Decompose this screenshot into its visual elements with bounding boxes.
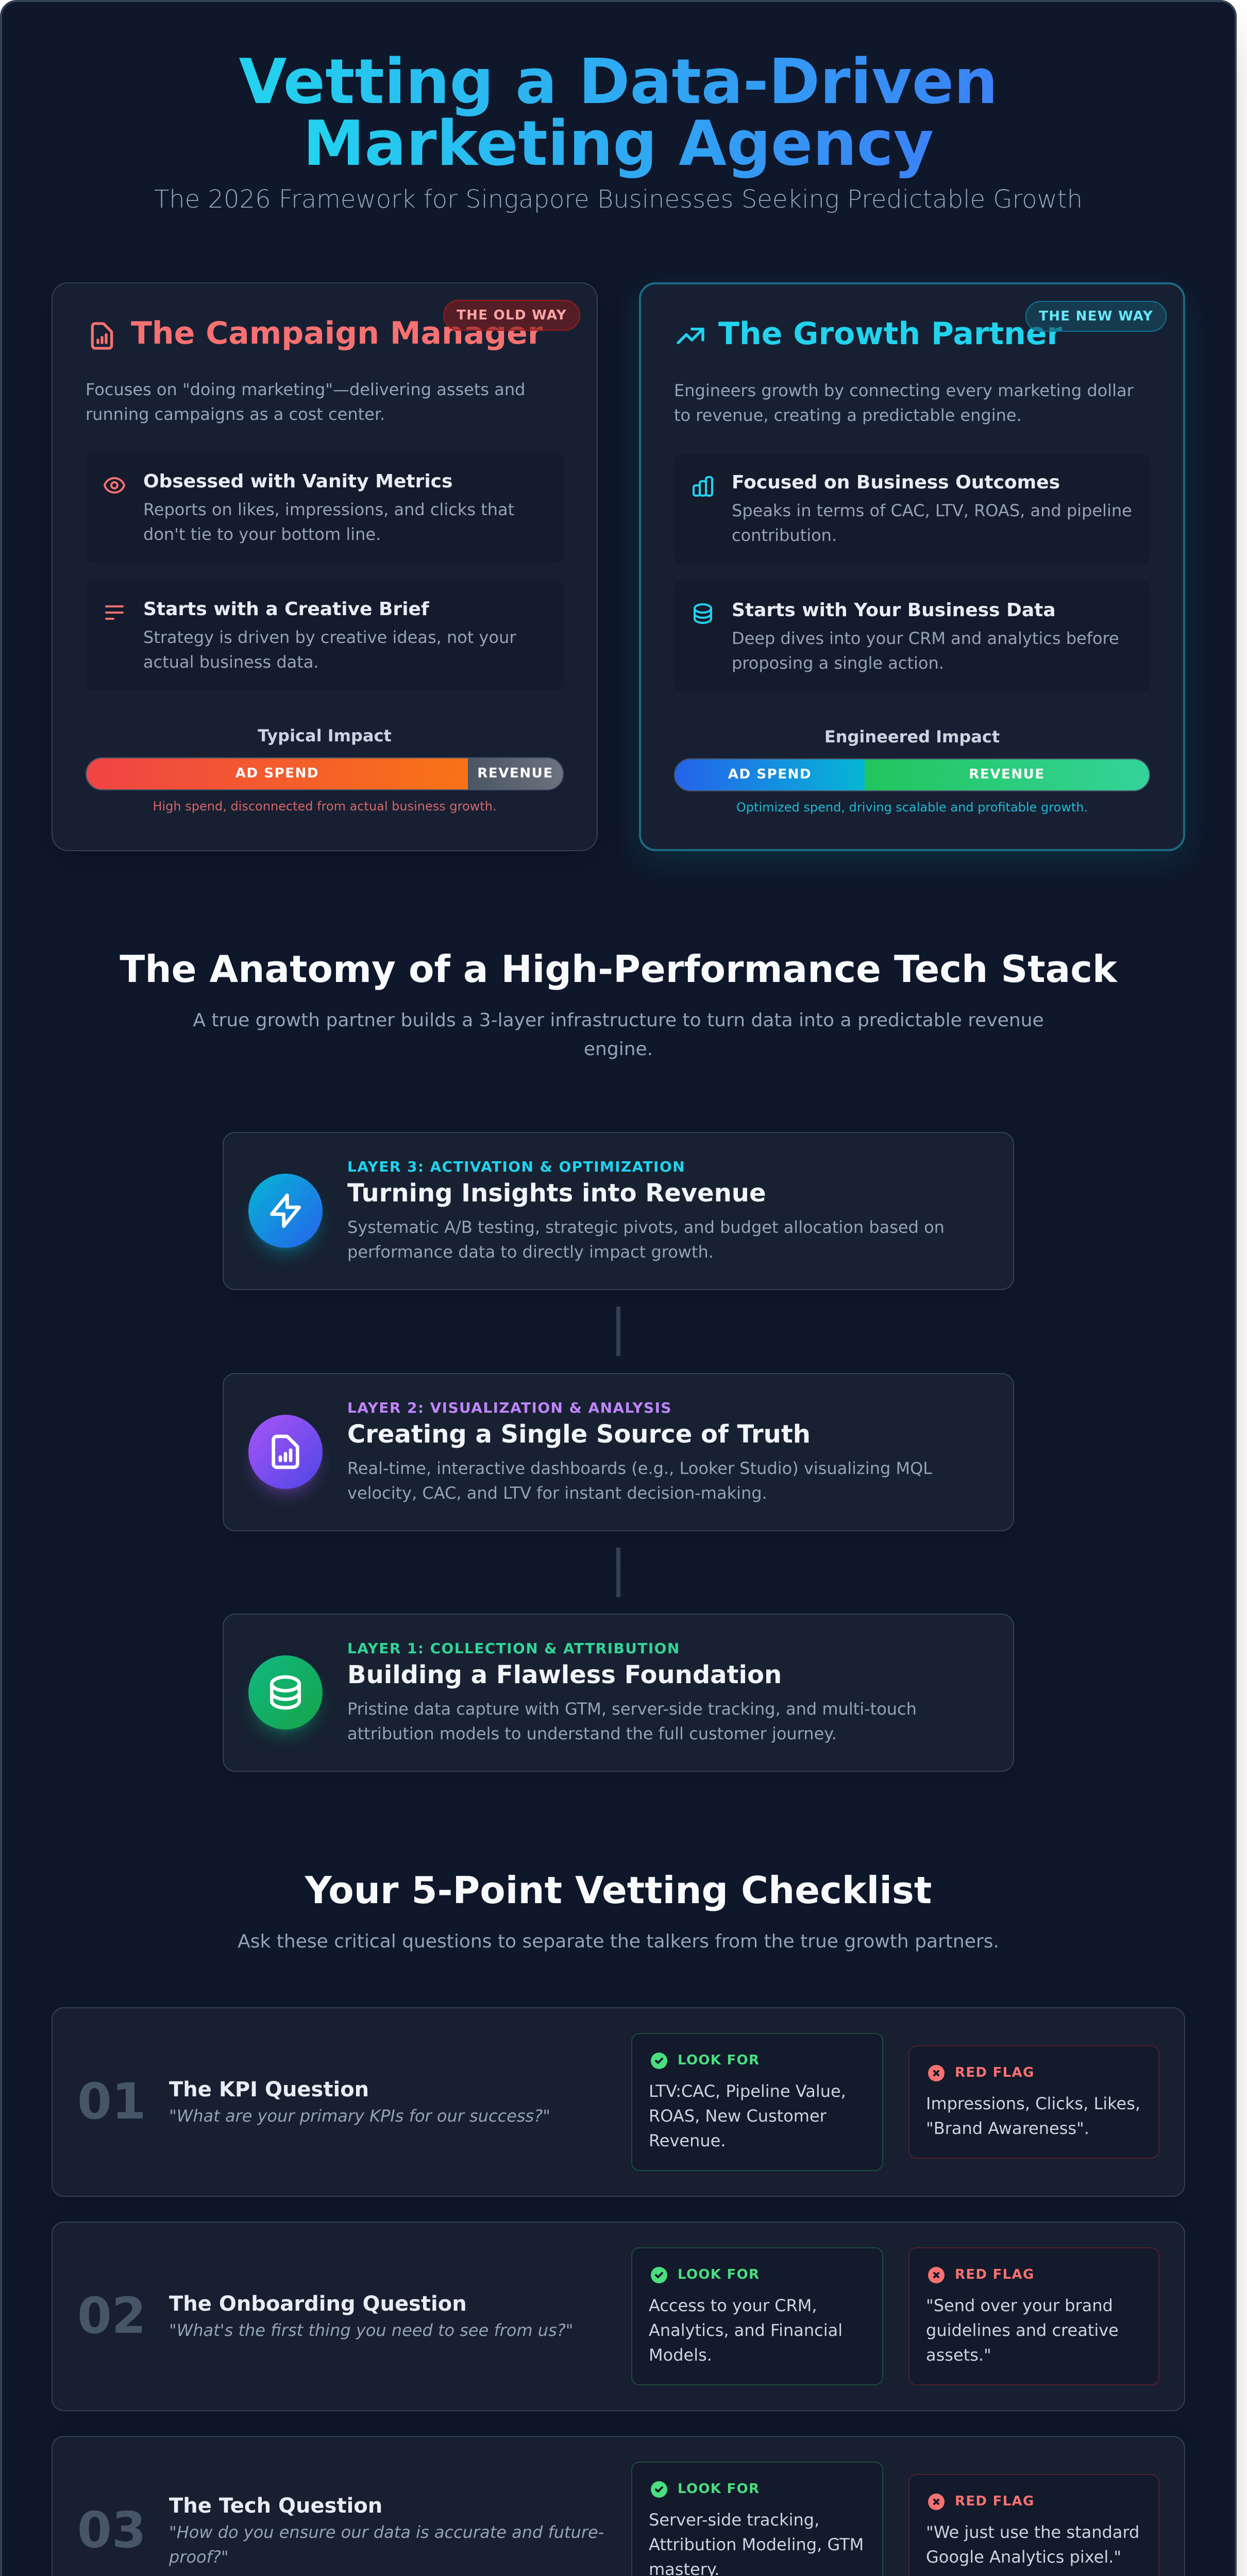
text: Impressions, Clicks, Likes, xyxy=(926,2094,1140,2113)
text: Access to your CRM, xyxy=(649,2296,817,2315)
layer text xyxy=(347,1459,932,1503)
label: RED FLAG xyxy=(955,2065,1035,2080)
layer text: attribution models to understand the full customer journey. xyxy=(347,1724,837,1743)
impact label: Engineered Impact xyxy=(824,727,1000,747)
item title: Obsessed with Vanity Metrics xyxy=(143,471,452,492)
connector xyxy=(616,1548,620,1597)
item text: Strategy is driven by creative ideas, not your xyxy=(143,628,516,647)
layer text xyxy=(347,1699,917,1743)
subtitle: The 2026 Framework for Singapore Businesses Seeking Predictable Growth xyxy=(154,185,1083,214)
item text xyxy=(732,501,1132,545)
layer label: LAYER 2: VISUALIZATION & ANALYSIS xyxy=(347,1399,672,1416)
description: Focuses on "doing marketing"—delivering assets and xyxy=(86,380,525,399)
text: Google Analytics pixel." xyxy=(926,2547,1121,2567)
item text: actual business data. xyxy=(143,652,319,672)
icon: cross xyxy=(928,2267,945,2283)
red flag box xyxy=(908,2045,1159,2159)
text: assets." xyxy=(926,2345,991,2365)
text xyxy=(649,2081,846,2150)
panel: layer 1 xyxy=(223,1614,1014,1772)
layer label: LAYER 3: ACTIVATION & OPTIMIZATION xyxy=(347,1158,685,1175)
ad spend segment: AD SPEND xyxy=(728,767,812,782)
label: LOOK FOR xyxy=(678,2267,760,2282)
layer text: Systematic A/B testing, strategic pivots, and budget allocation based on xyxy=(347,1217,945,1237)
item title: Starts with a Creative Brief xyxy=(143,599,429,620)
icon: eye xyxy=(103,477,126,494)
layer text: velocity, CAC, and LTV for instant decision-making. xyxy=(347,1483,767,1503)
layer title: Creating a Single Source of Truth xyxy=(347,1420,811,1449)
panel: layer 2 xyxy=(223,1373,1014,1531)
panel: layer 3 xyxy=(223,1132,1014,1290)
layer text: Pristine data capture with GTM, server-side tracking, and multi-touch xyxy=(347,1699,917,1719)
item text xyxy=(143,500,514,544)
question title: The Onboarding Question xyxy=(169,2292,467,2316)
icon: report document xyxy=(91,322,113,350)
text: tech stack intro: A true growth partner builds a 3-layer infrastructure to turn data into a predictable revenue xyxy=(193,1010,1044,1031)
label: LOOK FOR xyxy=(678,2481,760,2497)
icon: report document xyxy=(248,1415,323,1489)
item text: don't tie to your bottom line. xyxy=(143,524,381,544)
item: business outcomes xyxy=(674,453,1150,564)
layer text xyxy=(347,1217,945,1262)
description: Engineers growth by connecting every marketing dollar xyxy=(674,381,1134,400)
text xyxy=(649,2507,864,2576)
icon: trending up xyxy=(677,328,704,344)
item title: Focused on Business Outcomes xyxy=(732,472,1060,493)
text: Server-side tracking, xyxy=(649,2510,819,2530)
icon: text lines xyxy=(105,605,124,620)
item text: Reports on likes, impressions, and clicks that xyxy=(143,500,514,519)
revenue segment: REVENUE xyxy=(477,766,553,781)
text xyxy=(926,2520,1139,2569)
icon: check xyxy=(651,2053,667,2069)
heading: The Campaign Manager xyxy=(131,315,543,351)
look for box xyxy=(631,2247,883,2385)
question text xyxy=(169,2522,604,2567)
text xyxy=(926,2296,1119,2365)
description xyxy=(86,380,525,424)
revenue segment: REVENUE xyxy=(969,767,1045,782)
text: tech stack intro: engine. xyxy=(584,1039,653,1060)
bar chart: engineered impact xyxy=(674,758,1150,791)
label: LOOK FOR xyxy=(678,2053,760,2068)
number: 02 xyxy=(77,2287,146,2345)
item text: Deep dives into your CRM and analytics before xyxy=(732,629,1119,648)
impact caption: Optimized spend, driving scalable and profitable growth. xyxy=(736,800,1088,815)
number: 01 xyxy=(77,2073,146,2130)
panel: the growth partner xyxy=(639,282,1185,851)
icon: lightning xyxy=(248,1174,323,1248)
ad spend segment: AD SPEND xyxy=(235,766,319,781)
panel: checklist 02 xyxy=(52,2222,1185,2411)
badge: the new way xyxy=(1025,301,1167,332)
text: "Brand Awareness". xyxy=(926,2119,1089,2138)
text: "We just use the standard xyxy=(926,2522,1139,2542)
text: LTV:CAC, Pipeline Value, xyxy=(649,2081,846,2101)
text: "Send over your brand xyxy=(926,2296,1113,2315)
layer text: performance data to directly impact growth. xyxy=(347,1242,714,1262)
panel: checklist 03 xyxy=(52,2436,1185,2576)
badge: the new way: THE NEW WAY xyxy=(1039,309,1153,324)
label: RED FLAG xyxy=(955,2494,1035,2509)
text: Revenue. xyxy=(649,2131,726,2150)
description: running campaigns as a cost center. xyxy=(86,404,385,424)
item: vanity metrics xyxy=(86,452,564,563)
red flag box xyxy=(908,2247,1159,2385)
icon: database xyxy=(248,1655,323,1730)
item text xyxy=(732,629,1119,673)
item text: Speaks in terms of CAC, LTV, ROAS, and pipeline xyxy=(732,501,1132,520)
impact label: Typical Impact xyxy=(258,726,392,745)
question text: "How do you ensure our data is accurate and future- xyxy=(169,2522,604,2542)
item text xyxy=(143,628,516,672)
look for box xyxy=(631,2462,883,2576)
panel: the campaign manager xyxy=(52,282,598,851)
icon: cross xyxy=(928,2065,945,2081)
item: creative brief xyxy=(86,580,564,690)
title: Marketing Agency xyxy=(303,108,934,180)
text: Attribution Modeling, GTM xyxy=(649,2535,864,2554)
layer label: LAYER 1: COLLECTION & ATTRIBUTION xyxy=(347,1640,680,1657)
icon: database xyxy=(694,603,712,624)
item title: Starts with Your Business Data xyxy=(732,600,1056,621)
panel: checklist 01 xyxy=(52,2007,1185,2197)
ad spend segment xyxy=(675,759,865,790)
layer title: Turning Insights into Revenue xyxy=(347,1179,766,1208)
revenue segment xyxy=(468,758,563,789)
item text: proposing a single action. xyxy=(732,653,944,673)
question text: proof?" xyxy=(169,2547,229,2567)
badge: the old way: THE OLD WAY xyxy=(457,308,567,323)
layer title: Building a Flawless Foundation xyxy=(347,1660,782,1689)
title xyxy=(239,46,998,180)
text xyxy=(926,2094,1140,2138)
question title: The Tech Question xyxy=(169,2494,382,2518)
text: guidelines and creative xyxy=(926,2320,1119,2340)
connector xyxy=(616,1307,620,1356)
look for box xyxy=(631,2033,883,2171)
item text: contribution. xyxy=(732,526,837,545)
revenue segment xyxy=(865,759,1149,790)
text: Models. xyxy=(649,2345,712,2365)
text: Analytics, and Financial xyxy=(649,2320,842,2340)
impact caption: High spend, disconnected from actual business growth. xyxy=(153,799,497,814)
text: ROAS, New Customer xyxy=(649,2106,827,2126)
label: RED FLAG xyxy=(955,2267,1035,2282)
layer text: Real-time, interactive dashboards (e.g., Looker Studio) visualizing MQL xyxy=(347,1459,932,1478)
text: tech stack intro xyxy=(193,1010,1044,1060)
ad spend segment xyxy=(87,758,468,789)
icon: bar chart xyxy=(693,476,713,497)
icon: check xyxy=(651,2267,667,2283)
text xyxy=(649,2296,842,2365)
icon: cross xyxy=(926,2492,947,2512)
item: business data xyxy=(674,581,1150,691)
title: Vetting a Data-Driven xyxy=(239,46,998,118)
heading: tech stack: The Anatomy of a High-Performance Tech Stack xyxy=(120,947,1117,991)
badge: the old way xyxy=(443,300,580,331)
question title: The KPI Question xyxy=(169,2078,369,2102)
bar chart: typical impact xyxy=(86,757,564,790)
text: checklist intro: Ask these critical questions to separate the talkers from the true growth partners. xyxy=(238,1931,999,1952)
question text: "What's the first thing you need to see from us?" xyxy=(169,2320,573,2340)
description: to revenue, creating a predictable engine. xyxy=(674,405,1022,425)
number: 03 xyxy=(77,2501,146,2559)
icon: check xyxy=(649,2479,669,2500)
red flag box xyxy=(908,2474,1159,2576)
heading: checklist: Your 5-Point Vetting Checklist xyxy=(305,1869,932,1912)
heading: The Growth Partner xyxy=(718,316,1062,352)
description xyxy=(674,381,1134,425)
question text: "What are your primary KPIs for our success?" xyxy=(169,2106,550,2126)
